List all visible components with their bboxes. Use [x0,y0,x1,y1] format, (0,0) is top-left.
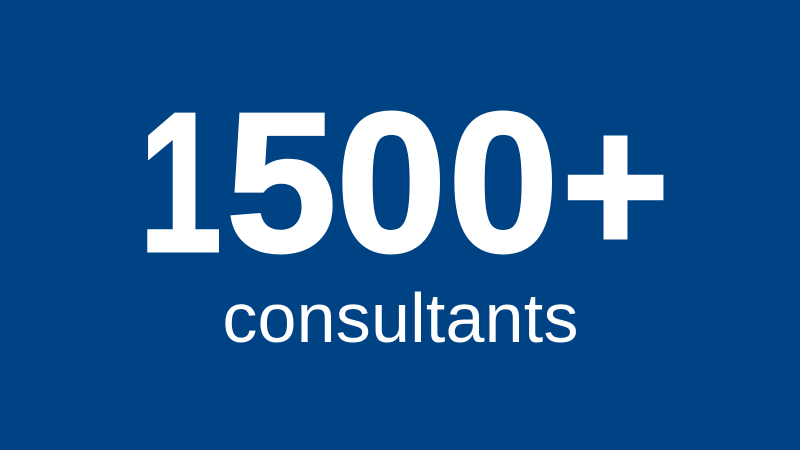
headline number: 0 [336,72,447,294]
headline number: 5 [226,72,337,294]
headline number: + [562,75,669,295]
caption: consultants [222,279,579,357]
headline number: 1 [139,72,222,294]
headline number: 0 [448,72,559,294]
